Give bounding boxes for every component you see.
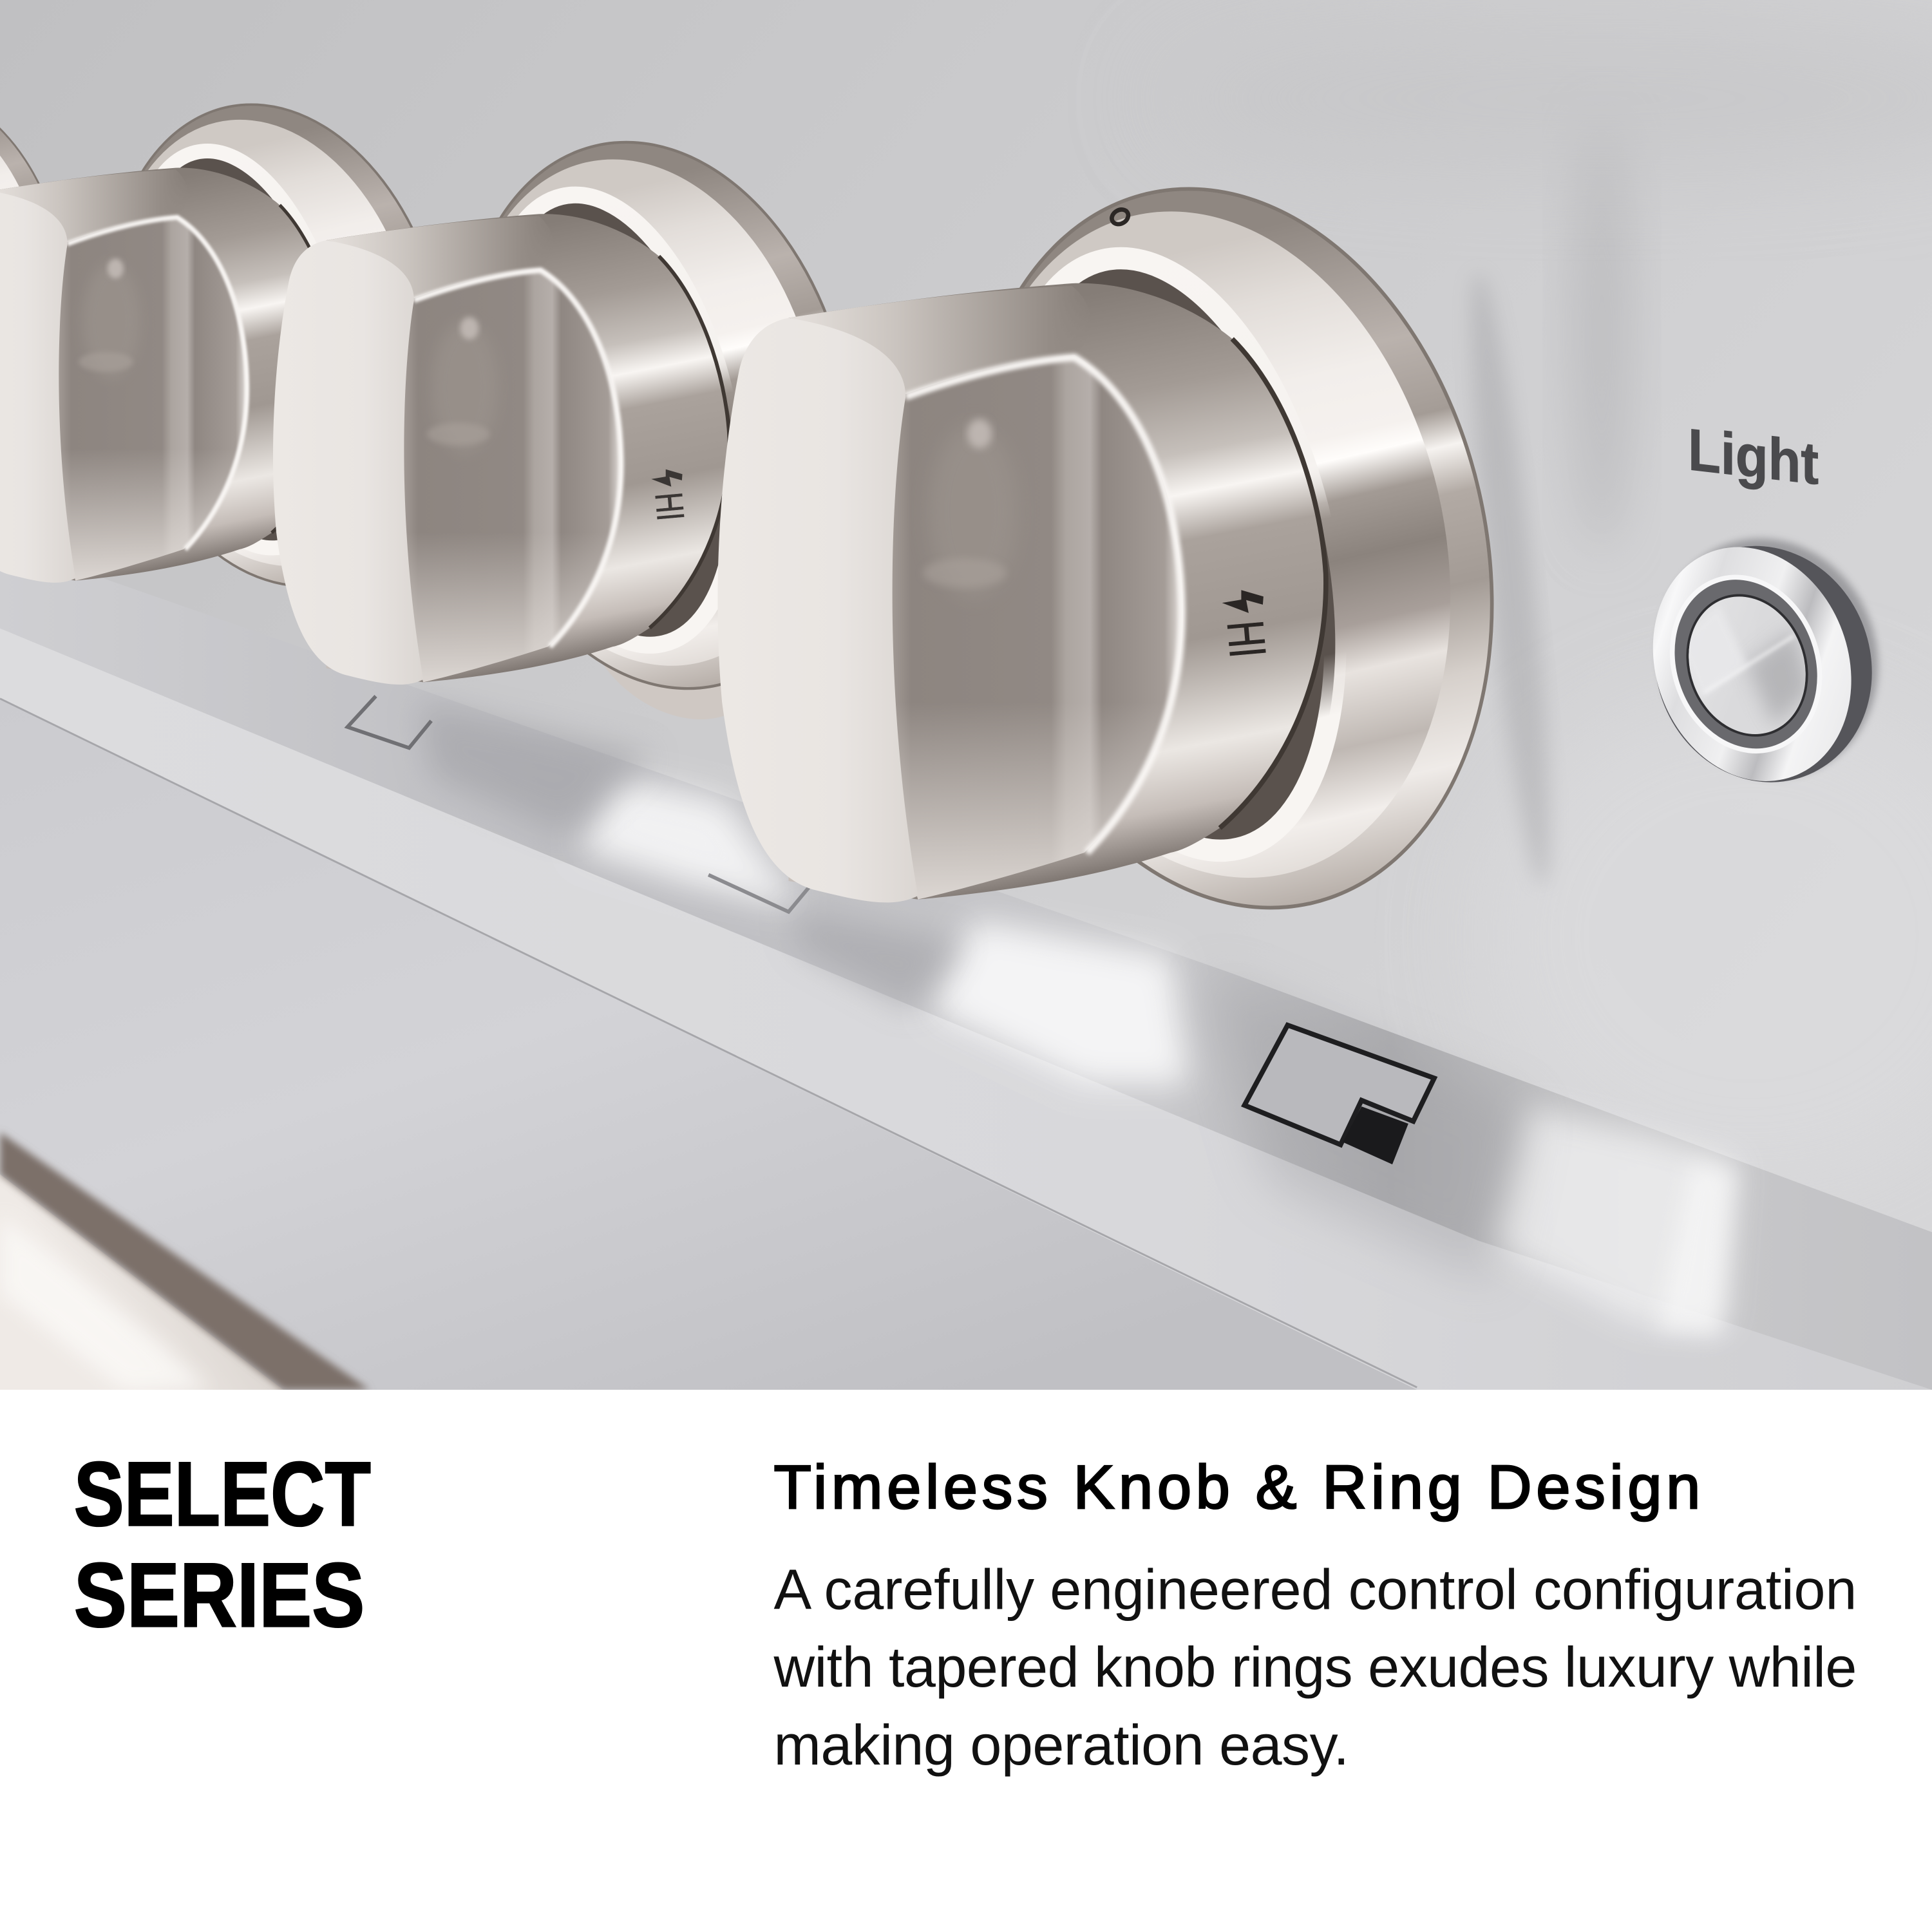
door: lower oven door panel	[0, 699, 1417, 1390]
title: SELECT SERIES	[74, 1444, 371, 1647]
icon: second knob HI label: HI	[647, 491, 693, 522]
knob: far left partial	[0, 128, 40, 189]
knob: main front knob with tapered ring	[717, 134, 1563, 963]
text block: description: with tapered knob rings exudes luxury while	[773, 1635, 1857, 1699]
label: Light: Light	[1688, 416, 1819, 497]
knob: second from front	[273, 100, 907, 730]
button: illuminated light switch	[1621, 507, 1911, 813]
oven handle	[0, 1132, 370, 1390]
title: SELECT SERIES: SERIES	[74, 1545, 365, 1647]
lip: reflective band under the control panel	[0, 542, 1932, 1390]
knob: third from front	[0, 103, 413, 586]
title: SELECT SERIES: SELECT	[74, 1444, 371, 1546]
icon: main knob HI label	[1216, 590, 1276, 660]
icon: burner position markers, small	[348, 696, 813, 912]
icon: main knob HI label: HI	[1216, 618, 1276, 660]
text block: description: A carefully engineered control configuration	[774, 1558, 1857, 1622]
text block: description: making operation easy.	[774, 1713, 1349, 1777]
panel: product photo of stainless steel range controls	[0, 0, 1932, 1390]
knob: second ring lower edge	[604, 666, 724, 719]
icon: burner position marker	[1244, 1025, 1434, 1164]
white caption background	[0, 1390, 1932, 1932]
text block: description	[773, 1558, 1857, 1777]
icon: off marker on ring	[1109, 207, 1131, 227]
icon: second knob HI label	[647, 469, 693, 522]
shadow: main knob on panel	[1456, 270, 1565, 888]
heading: Timeless Knob & Ring Design: Timeless Knob & Ring Design	[774, 1453, 1700, 1522]
